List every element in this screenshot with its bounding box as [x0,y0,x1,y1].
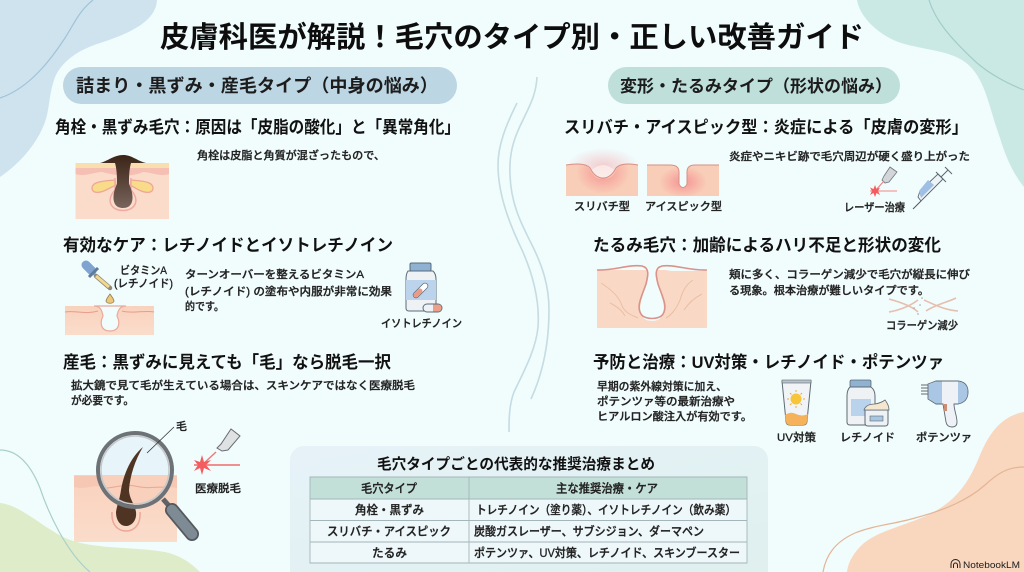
text: care description: 的です。 [185,299,224,313]
label: collagen loss: コラーゲン減少 [886,318,958,332]
label: hair with leader line [147,420,187,453]
heading: summary table: 毛穴タイプごとの代表的な推奨治療まとめ [377,455,655,473]
label: retinoid: (レチノイド) [114,277,173,290]
table: treatment summary: 主な推奨治療・ケア [556,480,658,496]
icon: retinoid bottle and cream [847,380,889,426]
text: blackhead description: 角栓は皮脂と角質が混ざったもので、 [197,148,385,162]
label: potenza: ポテンツァ [916,431,972,444]
heading: blackhead pores: 角栓・黒ずみ毛穴：原因は「皮脂の酸化」と「異常角化」 [55,117,460,137]
heading: effective care: 有効なケア：レチノイドとイソトレチノイン [63,236,393,255]
illustration: magnifier over hair in skin [74,433,192,542]
icon: collagen loss fibers [889,298,958,314]
text: prevention description: 早期の紫外線対策に加え、 [597,379,727,393]
text: sagging description: 頬に多く、コラーゲン減少で毛穴が縦長に伸び [729,267,970,281]
panel: crater and ice pick scars [564,117,972,444]
icon: isotretinoin bottle [406,263,442,312]
text: vellus description: 拡大鏡で見て毛が生えている場合は、スキンケアではなく医療脱毛 [71,378,415,392]
panel: summary table [290,446,768,572]
label: ice pick type: アイスピック型 [645,200,722,213]
table: treatment summary: 角栓・黒ずみ [355,503,424,517]
panel: right section header pill: 変形・たるみタイプ（形状の悩み） [620,77,892,96]
table: treatment summary [310,477,747,563]
table: treatment summary: 毛穴タイプ [361,482,417,496]
icon: vitamin A dropper [86,265,114,303]
icon: hair removal laser [194,429,240,475]
panel: right section header pill [608,67,900,104]
table: treatment summary: ポテンツァ、UV対策、レチノイド、スキンブースター [474,545,740,560]
icon: laser treatment [870,167,897,197]
background: blue blob top-left [0,0,157,177]
text: sagging description [729,267,970,297]
illustration: crater type [566,148,639,196]
heading: prevention and treatment: 予防と治療：UV対策・レチノイド・ポテンツァ [593,352,944,372]
background: peach blob bottom-right [823,412,1024,572]
table: treatment summary: スリバチ・アイスピック [327,524,451,538]
heading: scar type: スリバチ・アイスピック型：炎症による「皮膚の変形」 [564,117,968,137]
illustration: clogged pore [76,155,169,219]
text: prevention description: ヒアルロン酸注入が有効です。 [597,409,752,423]
label: UV protection: UV対策 [777,430,816,444]
background: green blob bottom-left [0,450,200,572]
logo: NotebookLM watermark: NotebookLM [963,560,1020,571]
title: 皮膚科医が解説！毛穴のタイプ別・正しい改善ガイド [160,20,864,54]
text: prevention description: ポテンツァ等の最新治療や [597,394,735,408]
illustration: treated pore [65,306,154,335]
label: crater type: スリバチ型 [574,200,630,213]
background: central wavy divider [498,77,549,432]
icon: syringe [913,167,952,209]
icon: sunscreen tube [782,380,811,425]
illustration: ice pick type [647,164,719,198]
text: care description: (レチノイド) の塗布や内服が非常に効果 [185,284,392,298]
label: isotretinoin: イソトレチノイン [381,317,462,330]
table: treatment summary: 炭酸ガスレーザー、サブシジョン、ダーマペン [474,524,704,538]
text: care description [185,267,392,313]
illustration: sagging pore [597,266,707,328]
text: vellus description [71,378,415,407]
icon: potenza device [921,381,968,427]
heading: sagging pores: たるみ毛穴：加齢によるハリ不足と形状の変化 [593,236,941,255]
text: scar description: 炎症やニキビ跡で毛穴周辺が硬く盛り上がった [729,149,970,163]
text: vellus description: が必要です。 [71,393,134,407]
label: hair with leader line: 毛 [176,420,187,433]
label: medical hair removal: 医療脱毛 [195,481,241,495]
background: green blob top-right [857,0,1024,187]
panel: left section header pill [63,67,457,104]
label: retinoid: レチノイド [840,431,895,444]
panel: left section header pill: 詰まり・黒ずみ・産毛タイプ（中身の悩み） [76,76,438,96]
label: laser treatment: レーザー治療 [844,200,905,214]
text: care description: ターンオーバーを整えるビタミンA [185,267,365,281]
heading: vellus hair: 産毛：黒ずみに見えても「毛」なら脱毛一択 [63,353,391,372]
panel: blackhead pores [55,117,462,542]
table: treatment summary: たるみ [372,546,407,560]
text: sagging description: る現象。根本治療が難しいタイプです。 [729,283,929,297]
label: vitamin A: ビタミンA [120,264,168,277]
table: treatment summary: トレチノイン（塗り薬）、イソトレチノイン（飲み薬） [476,502,736,517]
text: prevention description [597,379,752,423]
